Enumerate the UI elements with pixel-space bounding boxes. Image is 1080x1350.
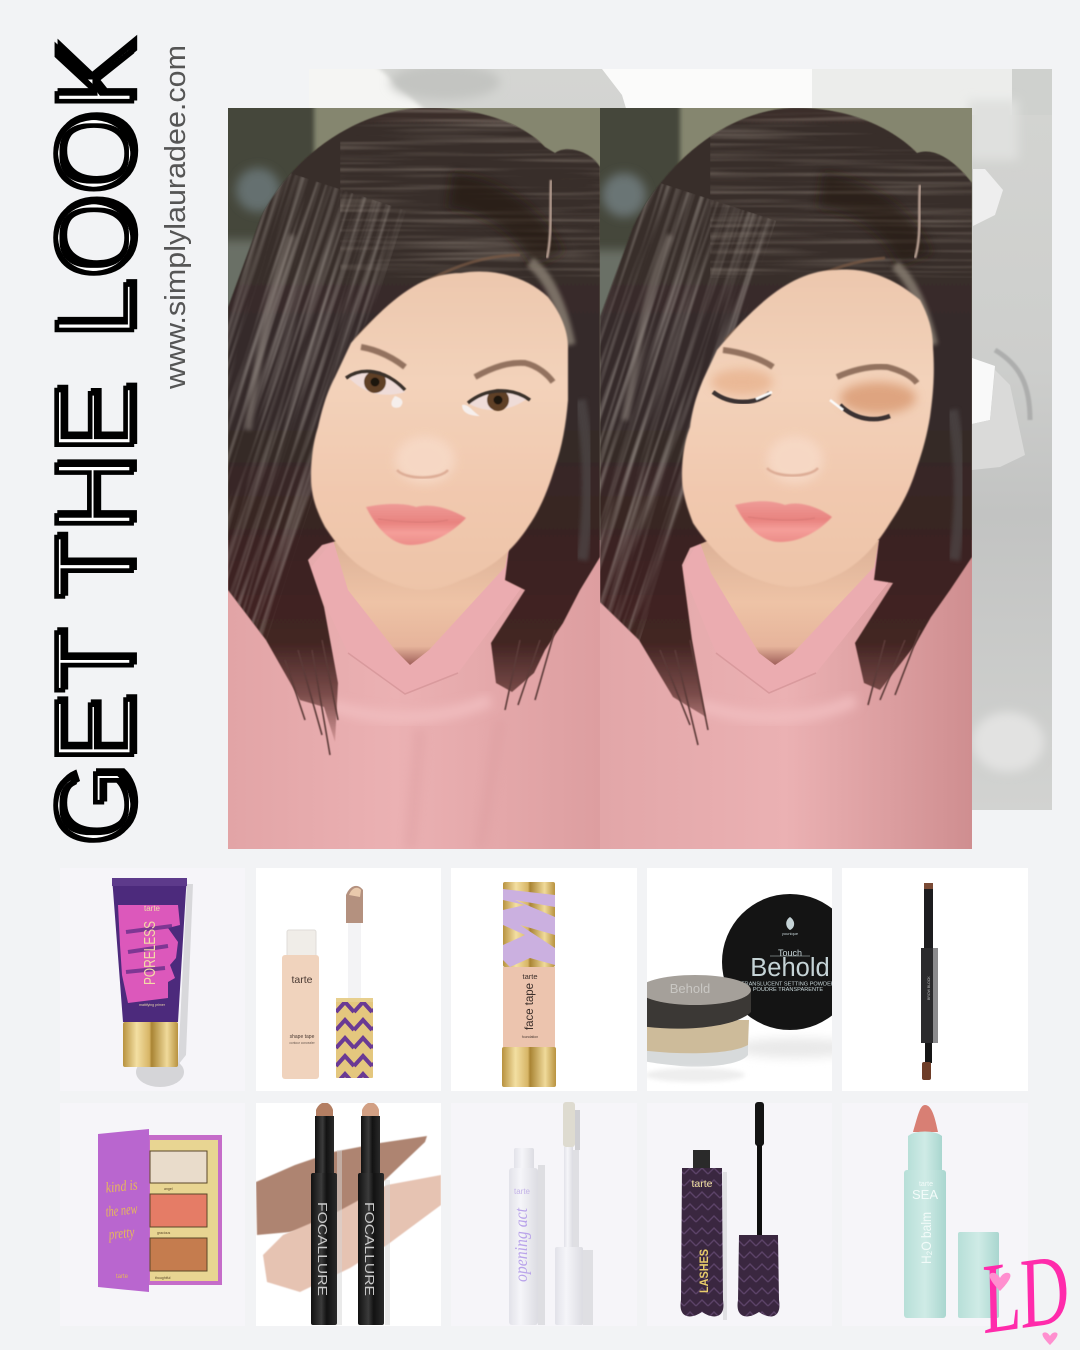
lips <box>366 504 466 545</box>
product: face tape foundation <box>451 868 637 1091</box>
product: brow pencil <box>842 868 1028 1091</box>
vertical title: GET <box>35 626 160 844</box>
neck <box>699 540 879 665</box>
face <box>682 269 934 587</box>
product: blush palette: gracious <box>157 1231 170 1235</box>
product: shape tape concealer <box>256 868 441 1091</box>
product: lights camera lashes mascara: LASHES <box>697 1249 711 1293</box>
product: focallure shadow sticks: FOCALLURE <box>315 1202 330 1296</box>
face <box>311 271 568 590</box>
vertical title: LOOK <box>32 39 157 340</box>
product: behold powder: younique <box>782 931 799 936</box>
product: blush palette: thoughtful <box>155 1276 171 1280</box>
product: lights camera lashes mascara <box>647 1102 832 1326</box>
product: opening act lash primer <box>451 1102 637 1326</box>
hair <box>600 108 972 746</box>
eye right <box>462 389 530 416</box>
vertical title: GET <box>32 629 157 847</box>
icon: heart left <box>990 1273 1010 1291</box>
product: behold powder: TRANSLUCENT SETTING POWDER <box>741 982 835 988</box>
vertical title: LOOK <box>35 36 160 337</box>
swatch brown <box>256 1136 427 1235</box>
icon: heart lower right <box>1042 1332 1058 1345</box>
product: behold powder: Touch <box>778 948 802 958</box>
product: focallure shadow sticks <box>256 1102 441 1326</box>
photo background <box>228 108 600 540</box>
photo: eyes closed <box>600 108 972 849</box>
product: behold powder: Behold <box>750 954 830 982</box>
product: focallure shadow sticks: FOCALLURE <box>362 1202 377 1296</box>
eye left <box>346 371 405 408</box>
product: face tape foundation: foundation <box>522 1035 538 1039</box>
vertical title: THE <box>32 382 157 600</box>
product: poreless primer: PORELESS <box>142 921 159 985</box>
product: blush palette: angel <box>164 1187 173 1191</box>
sweater <box>600 540 972 849</box>
watercolor backdrop <box>378 69 1052 810</box>
sweater <box>228 540 600 849</box>
jar: Behold <box>670 981 710 996</box>
product: sea h2o balm <box>842 1103 1028 1326</box>
product: lights camera lashes mascara: tarte <box>691 1178 713 1190</box>
product: poreless primer: tarte <box>144 904 161 913</box>
vertical title <box>32 36 160 847</box>
website url: www.simplylauradee.com <box>160 45 192 390</box>
product: behold powder: POUDRE TRANSPARENTE <box>753 987 823 993</box>
swatch pink <box>263 1175 441 1292</box>
product: blush palette: tarte <box>116 1274 129 1280</box>
product: shape tape concealer: tarte <box>291 974 313 986</box>
product: shape tape concealer: shape tape <box>290 1034 315 1040</box>
neck <box>333 540 510 665</box>
product: face tape foundation: tarte <box>522 972 538 981</box>
hair <box>228 108 600 756</box>
product: opening act lash primer: opening act <box>511 1207 531 1282</box>
product: sea h2o balm: tarte <box>919 1181 933 1188</box>
vertical title: LOOK <box>32 39 157 340</box>
jar <box>639 975 751 1067</box>
photo background <box>600 108 972 540</box>
photo: eyes open <box>228 108 600 849</box>
eyeshadow <box>711 369 916 414</box>
closed lashes left <box>713 392 772 402</box>
vertical title: GET <box>32 629 157 847</box>
vertical title: THE <box>32 382 157 600</box>
product: sea h2o balm: SEA <box>912 1187 938 1202</box>
vertical title: THE <box>35 379 160 597</box>
product: blush palette: the new <box>105 1201 138 1221</box>
lips <box>735 501 832 542</box>
product: opening act lash primer: tarte <box>514 1187 531 1196</box>
product: poreless primer: mattifying primer <box>139 1003 166 1007</box>
product: brow pencil: BROW BLOCK <box>927 976 931 1000</box>
product: sea h2o balm: H₂O balm <box>918 1212 934 1264</box>
product: shape tape concealer: contour concealer <box>289 1041 316 1045</box>
product: face tape foundation: face tape <box>522 983 536 1030</box>
product: blush palette <box>60 1103 245 1326</box>
product: blush palette: pretty <box>107 1225 136 1243</box>
product: blush palette: kind is <box>105 1177 138 1197</box>
product: behold powder <box>647 868 832 1091</box>
product: poreless primer <box>60 868 245 1091</box>
closed lashes right <box>830 400 890 419</box>
